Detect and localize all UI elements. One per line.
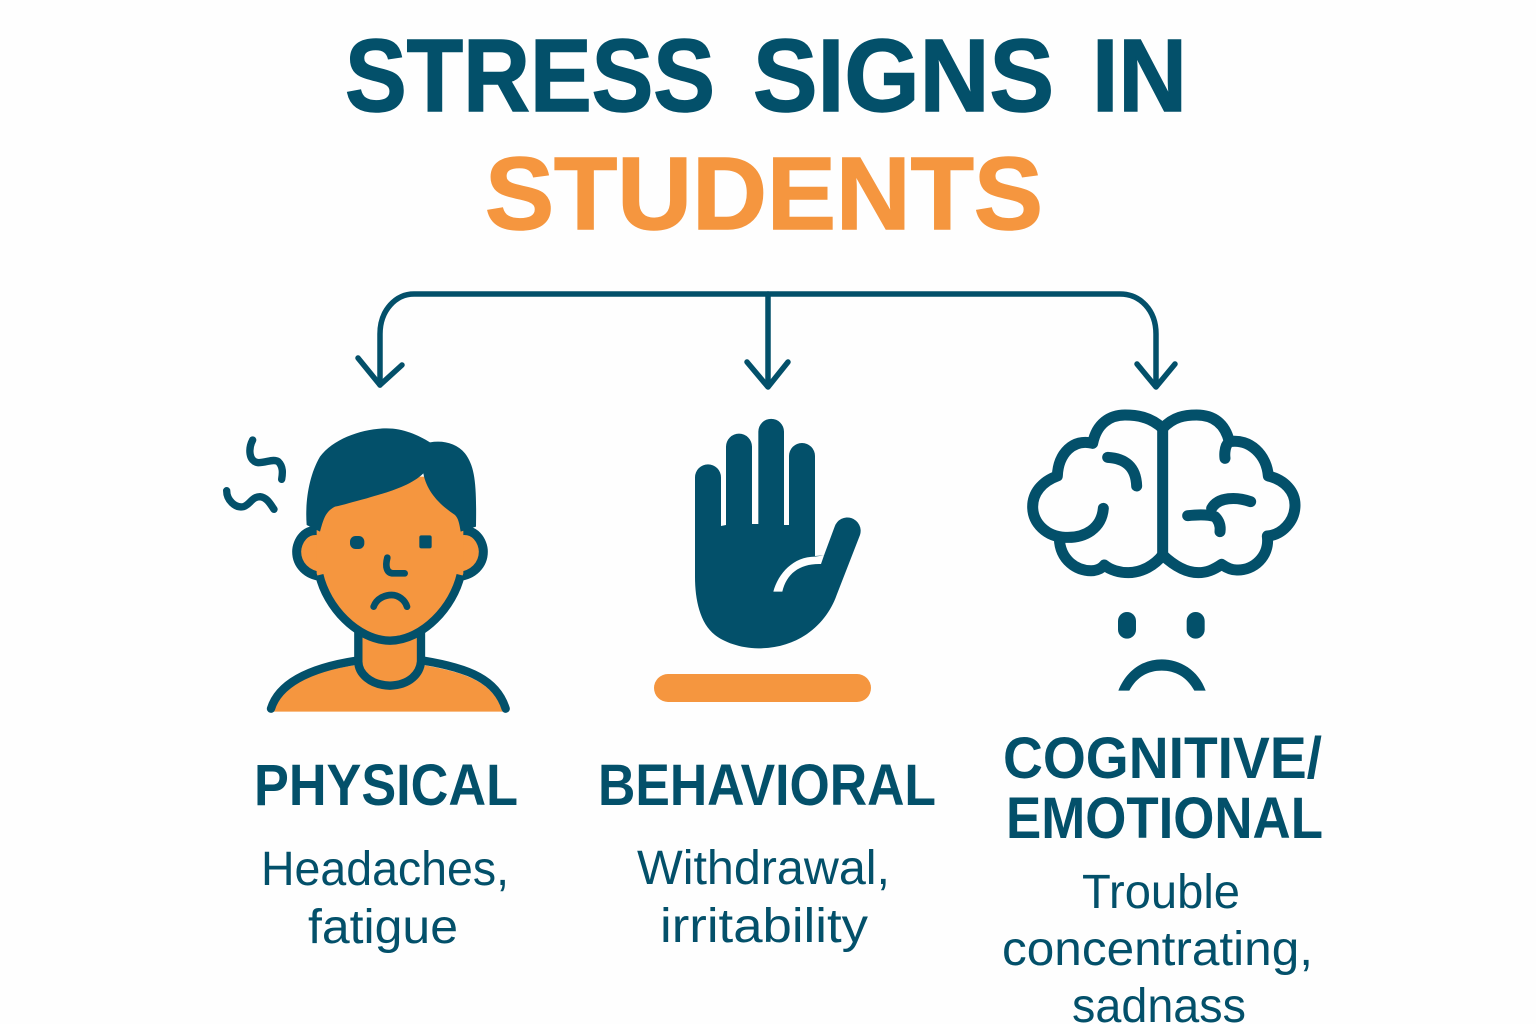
arrows: three branches from title: [358, 294, 1175, 387]
text: behavioral signs: irritability: [660, 900, 868, 953]
title: STUDENTS: [485, 136, 1043, 251]
text: physical signs: [261, 843, 509, 954]
title: IN: [1092, 18, 1187, 133]
text: physical signs: Headaches,: [261, 843, 509, 896]
panel: behavioral: [598, 419, 936, 953]
panel: physical: [227, 428, 518, 954]
heading: cognitive/emotional: EMOTIONAL: [1006, 786, 1323, 851]
icon: raised hand: [695, 419, 861, 648]
icon: stressed student: [227, 428, 506, 712]
text: cognitive signs: Trouble: [1082, 866, 1240, 919]
text: physical signs: fatigue: [308, 901, 458, 954]
heading: physical: PHYSICAL: [254, 753, 518, 818]
icon: orange bar: [654, 674, 871, 702]
heading: behavioral: BEHAVIORAL: [598, 753, 936, 818]
title: [345, 18, 1187, 251]
title: SIGNS: [753, 18, 1054, 133]
text: behavioral signs: Withdrawal,: [637, 842, 890, 895]
panel: cognitive/emotional: [1002, 415, 1323, 1024]
heading: cognitive/emotional: [1003, 726, 1323, 851]
text: cognitive signs: concentrating,: [1002, 923, 1313, 976]
heading: cognitive/emotional: COGNITIVE/: [1003, 726, 1322, 791]
title: STRESS: [345, 18, 715, 133]
text: behavioral signs: [637, 842, 890, 953]
icon: brain with sad face: [1033, 415, 1295, 691]
text: cognitive signs: [1002, 866, 1313, 1024]
